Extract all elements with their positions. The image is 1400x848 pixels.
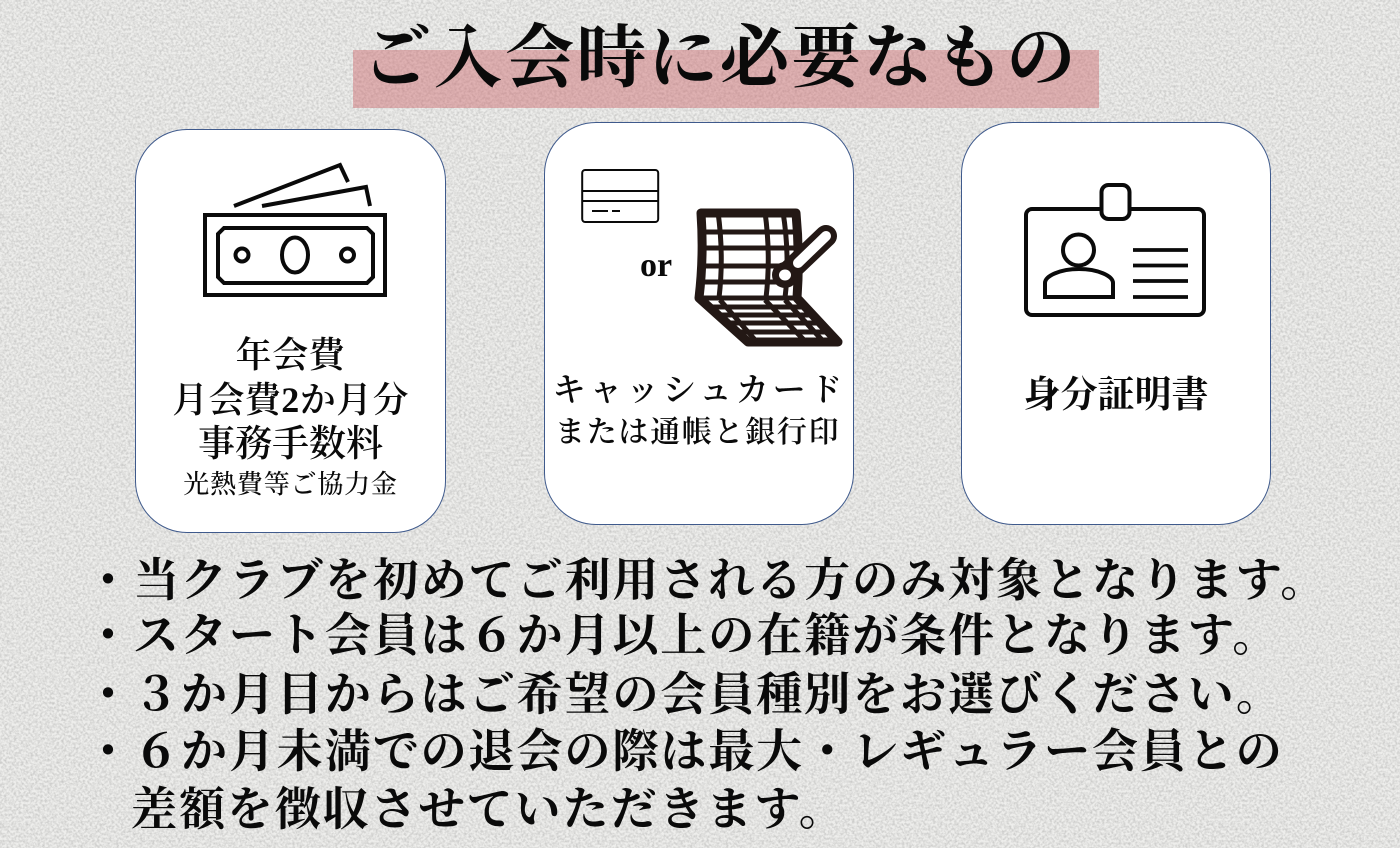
panel: identification [961, 122, 1271, 525]
note 4 line 1: ・６か月未満での退会の際は最大・レギュラー会員との [85, 726, 1284, 777]
icon: cash card [581, 169, 660, 223]
icon: banknotes [203, 162, 387, 297]
icon: ID badge [1024, 183, 1206, 317]
panel: cash card or passbook [544, 122, 854, 525]
fee line: administration fee: 事務手数料 [198, 424, 383, 465]
fee line: utilities contribution: 光熱費等ご協力金 [183, 470, 398, 499]
text: or passbook and bank seal: または通帳と銀行印 [555, 416, 840, 449]
title highlight band [353, 50, 1099, 108]
note 3: ・３か月目からはご希望の会員種別をお選びください。 [85, 669, 1284, 720]
fee line: annual fee: 年会費 [236, 335, 345, 375]
fee line: two months of monthly fee: 月会費2か月分 [172, 380, 409, 420]
icon: passbook and seal [694, 208, 842, 346]
text: or: or [640, 247, 672, 284]
notes list [85, 555, 1328, 835]
panel: fees [135, 129, 446, 533]
text: identification document: 身分証明書 [1024, 375, 1208, 416]
note 2: ・スタート会員は６か月以上の在籍が条件となります。 [85, 610, 1280, 661]
note 4 line 2: 差額を徴収させていただきます。 [131, 784, 847, 835]
text: cash card: キャッシュカード [552, 373, 846, 409]
note 1: ・当クラブを初めてご利用される方のみ対象となります。 [85, 555, 1328, 606]
title: ご入会時に必要なもの [362, 20, 1078, 96]
